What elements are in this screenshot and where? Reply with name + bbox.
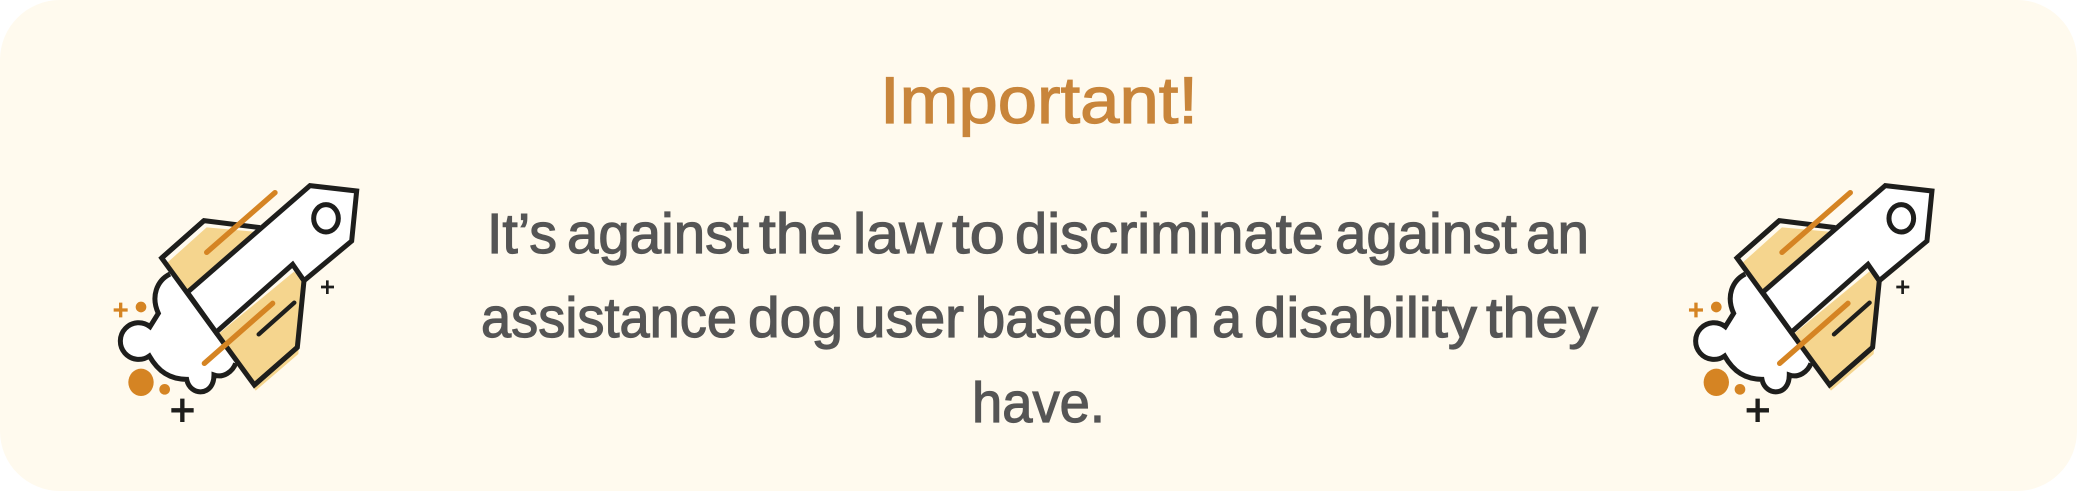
body text: they [1486,286,1599,350]
body text: assistance [481,286,737,350]
body text: an [1526,202,1589,266]
body text: user [854,286,964,350]
body text: against [567,202,749,266]
body text: against [1335,202,1517,266]
icon: right rocket [1689,186,1932,422]
icon: left rocket [114,186,357,422]
body text [481,202,1599,435]
body text: based [975,286,1123,350]
body text: disability [1254,286,1478,350]
body text: dog [748,286,843,350]
body text: to [952,202,1005,266]
body text: It’s [487,202,557,266]
body text: have. [972,371,1105,435]
body text: a [1212,286,1242,350]
body text: the [759,202,843,266]
body text: on [1135,286,1200,350]
body text: law [853,202,943,266]
title: Important! [880,63,1198,137]
body text: discriminate [1015,202,1324,266]
